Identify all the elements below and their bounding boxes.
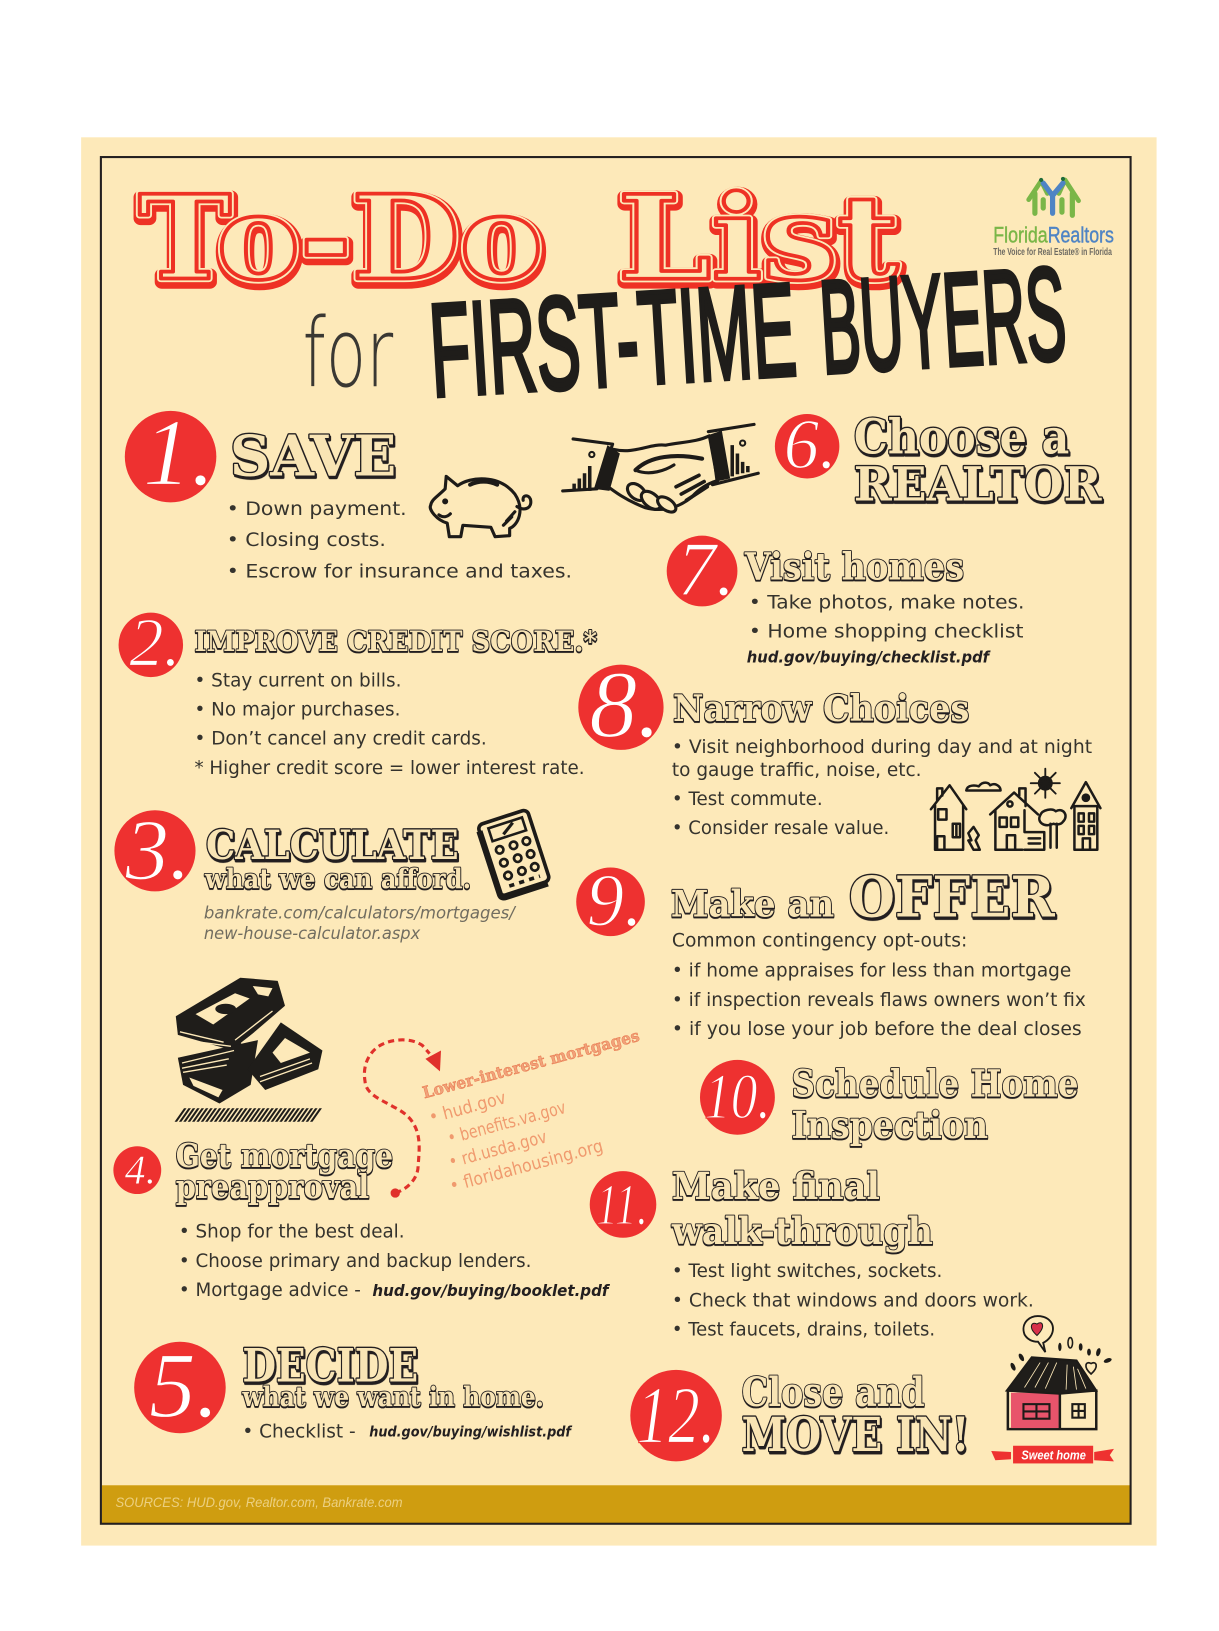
bullets: • Test commute. xyxy=(672,789,823,810)
step 10: home inspection: Inspection xyxy=(792,1103,988,1147)
sources text: SOURCES: HUD.gov, Realtor.com, Bankrate.com xyxy=(115,1495,403,1510)
icon: stacks of money xyxy=(176,978,322,1115)
number badge 1: 1. xyxy=(143,400,215,506)
bullets: • Stay current on bills. xyxy=(194,670,401,691)
number badge 11: 11. xyxy=(596,1172,648,1237)
subtitle: FIRST-TIME BUYERS: FIRST-TIME xyxy=(426,255,800,424)
number badge 9: 9. xyxy=(587,860,643,943)
number badge 6: 6. xyxy=(784,406,837,484)
icon: sweet home house xyxy=(991,1316,1114,1463)
heading: Make an: Make an xyxy=(671,882,834,925)
logo tagline: The Voice for Real Estate® in Florida xyxy=(993,247,1112,258)
title: To-Do List: List xyxy=(619,174,900,310)
logo icon xyxy=(1029,177,1079,215)
bullets: • if inspection reveals flaws owners won’t fix xyxy=(672,990,1086,1011)
heading: Make final xyxy=(672,1164,880,1208)
link: hud.gov/buying/checklist.pdf xyxy=(747,649,991,667)
callout links: • hud.gov xyxy=(427,1088,508,1128)
bullets: • if home appraises for less than mortgage xyxy=(672,961,1071,982)
step 7: visit homes xyxy=(667,526,1025,667)
bullets: • if you lose your job before the deal closes xyxy=(672,1019,1082,1040)
step 4: mortgage preapproval: preapproval xyxy=(176,1168,369,1206)
checklist: hud.gov/buying/wishlist.pdf xyxy=(369,1423,572,1440)
bullets: • Check that windows and doors work. xyxy=(672,1290,1034,1311)
title: To-Do List: To-Do xyxy=(138,171,543,307)
number badge 5: 5. xyxy=(149,1335,219,1438)
step 6: choose a realtor xyxy=(775,406,1103,512)
roof xyxy=(1007,1357,1096,1394)
icon: calculator xyxy=(478,809,551,899)
bullets: • Don’t cancel any credit cards. xyxy=(194,729,487,750)
footer band xyxy=(102,1485,1131,1524)
bullets: • Test light switches, sockets. xyxy=(672,1261,942,1282)
bullets: • Visit neighborhood during day and at night xyxy=(672,737,1092,758)
logo wordmark: FloridaRealtors xyxy=(993,222,1114,247)
title: To-Do List: List xyxy=(618,171,899,307)
step 11: final walk-through xyxy=(590,1164,1034,1340)
heading: Schedule Home xyxy=(792,1061,1079,1105)
banner xyxy=(991,1451,1011,1460)
step 10: home inspection xyxy=(700,1060,1079,1147)
bullets: • Closing costs. xyxy=(227,530,386,551)
heading: OFFER: OFFER xyxy=(849,864,1055,930)
bullets xyxy=(194,670,585,779)
title: To-Do List: To-Do xyxy=(138,171,543,307)
bullets xyxy=(179,1222,611,1301)
heading: Narrow Choices xyxy=(673,687,969,730)
step 6: choose a realtor: REALTOR xyxy=(854,457,1103,512)
bullets xyxy=(227,499,572,582)
heading: CALCULATE: CALCULATE xyxy=(206,821,459,869)
bullets: • Escrow for insurance and taxes. xyxy=(227,561,572,582)
logo: Florida Realtors xyxy=(993,177,1114,258)
number badge 3: 3. xyxy=(124,801,191,898)
title: To-Do List: To-Do xyxy=(139,174,544,310)
number badge 2: 2. xyxy=(129,605,181,681)
bullets: * Higher credit score = lower interest rate. xyxy=(194,758,585,779)
poster background xyxy=(81,137,1157,1546)
link: new-house-calculator.aspx xyxy=(204,924,420,943)
sparkles xyxy=(1009,1338,1112,1371)
step 5: decide xyxy=(134,1335,572,1442)
step 8: narrow choices xyxy=(578,651,1100,850)
house body xyxy=(1008,1391,1096,1429)
callout links: • benefits.va.gov xyxy=(445,1098,568,1149)
bullets: • Take photos, make notes. xyxy=(749,592,1025,613)
step 11: final walk-through: walk-through xyxy=(671,1209,933,1253)
title: To-Do List: List xyxy=(618,171,899,307)
icon: row of houses xyxy=(931,769,1100,850)
heading: Get mortgage xyxy=(176,1137,393,1175)
step 12: close and move in: MOVE IN! xyxy=(742,1408,969,1463)
windows xyxy=(1023,1404,1085,1419)
subheading: what we want in home. xyxy=(241,1382,544,1413)
subheading: what we can afford. xyxy=(204,864,471,895)
frame xyxy=(101,157,1131,1524)
bullets: • Test faucets, drains, toilets. xyxy=(672,1319,935,1340)
step 4: mortgage preapproval xyxy=(113,1137,611,1301)
callout links xyxy=(427,1088,605,1197)
bullets xyxy=(672,737,1092,839)
number badge 10: 10. xyxy=(704,1061,771,1132)
heading: IMPROVE CREDIT SCORE.* xyxy=(194,625,597,658)
number badge 4 xyxy=(113,1146,161,1194)
step 12: close and move in xyxy=(630,1316,1114,1463)
icon: sweet home house: Sweet home xyxy=(1021,1447,1086,1462)
bullets: to gauge traffic, noise, etc. xyxy=(672,760,922,781)
bullets: hud.gov/buying/booklet.pdf xyxy=(372,1282,611,1300)
speech bubble with heart xyxy=(1024,1316,1053,1352)
bullets xyxy=(672,931,1086,1040)
bullets xyxy=(749,592,1025,643)
number badge 7: 7. xyxy=(677,526,735,612)
heading: SAVE: SAVE xyxy=(230,423,396,489)
heading: DECIDE xyxy=(242,1338,418,1392)
step 1: save xyxy=(125,400,572,582)
step 3: calculate xyxy=(114,801,551,943)
bullets: Common contingency opt-outs: xyxy=(672,931,967,952)
callout links: • floridahousing.org xyxy=(448,1137,605,1197)
number badge 4: 4. xyxy=(125,1147,156,1193)
hatched shadow xyxy=(179,1108,319,1121)
bullets: • Home shopping checklist xyxy=(749,622,1023,643)
callout links: • rd.usda.gov xyxy=(446,1127,549,1173)
checklist: • Checklist - xyxy=(242,1421,356,1442)
step 9: make an offer xyxy=(576,860,1086,1040)
dashed arrow xyxy=(364,1040,441,1198)
number badge 8: 8. xyxy=(589,651,661,757)
number badge 12: 12. xyxy=(637,1371,716,1461)
bullets: • Mortgage advice - xyxy=(179,1280,361,1301)
subtitle: for: for xyxy=(303,297,394,409)
step 2: improve credit score xyxy=(119,605,597,779)
heading: Visit homes xyxy=(744,544,964,588)
bullets: • Shop for the best deal. xyxy=(179,1222,405,1243)
bullets: • Down payment. xyxy=(227,499,407,520)
heading: Close and xyxy=(742,1368,925,1416)
title: To-Do List xyxy=(138,171,900,310)
checklist xyxy=(242,1421,572,1442)
callout heading: Lower-interest mortgages xyxy=(420,1026,641,1102)
bullets: • No major purchases. xyxy=(194,700,400,721)
link xyxy=(204,903,517,943)
bullets: • Choose primary and backup lenders. xyxy=(179,1251,531,1272)
link: bankrate.com/calculators/mortgages/ xyxy=(204,903,517,922)
bullets: • Consider resale value. xyxy=(672,818,889,839)
icon: piggy bank xyxy=(430,476,531,537)
heading: Choose a xyxy=(854,409,1069,465)
icon: handshake xyxy=(563,424,758,515)
callout: lower-interest mortgages xyxy=(420,1026,641,1197)
bullets xyxy=(672,1261,1034,1340)
